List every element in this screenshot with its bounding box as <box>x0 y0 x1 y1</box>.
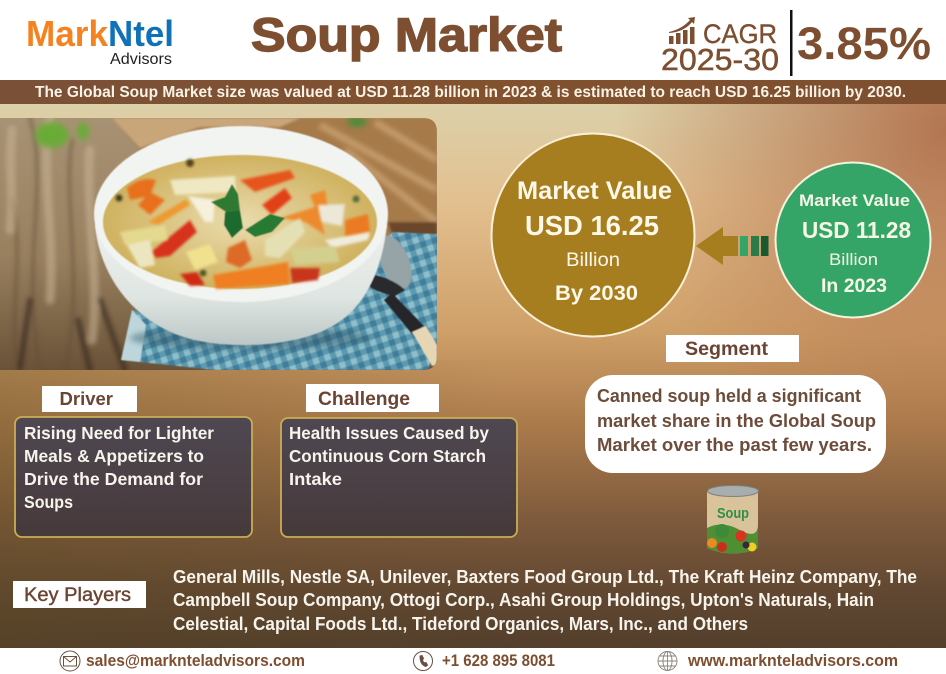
logo: MarkNtel Advisors <box>26 13 174 68</box>
soup surface <box>103 155 377 289</box>
photo: bowl of vegetable soup <box>0 117 437 370</box>
summary band <box>0 80 946 104</box>
driver panel: Meals & Appetizers to <box>24 446 204 466</box>
segment heading: Segment <box>685 339 769 360</box>
challenge panel: Continuous Corn Starch <box>289 446 486 466</box>
key players list <box>173 567 917 634</box>
icon: growth chart <box>669 17 695 44</box>
key players heading: Key Players <box>24 585 131 606</box>
challenge heading: Challenge <box>318 388 410 410</box>
header background <box>0 0 946 80</box>
driver panel: Rising Need for Lighter <box>24 423 214 443</box>
bowl rim <box>94 126 388 302</box>
circle: market value 2023 <box>776 162 930 318</box>
spoon <box>368 231 437 366</box>
driver panel: Drive the Demand for <box>24 469 203 489</box>
key players list: Celestial, Capital Foods Ltd., Tideford Organics, Mars, Inc., and Others <box>173 614 748 634</box>
footer <box>0 648 946 674</box>
driver heading <box>42 386 137 412</box>
bowl shadow on cloth <box>130 326 370 350</box>
logo: MarkNtel Advisors: Advisors <box>110 51 172 68</box>
title: Soup Market <box>251 8 562 61</box>
circle: market value 2030: By 2030 <box>555 282 638 305</box>
driver panel <box>15 417 252 537</box>
circle: market value 2030: USD 16.25 <box>525 210 659 241</box>
phone number: +1 628 895 8081 <box>442 652 555 670</box>
segment text bubble: market share in the Global Soup <box>597 410 876 431</box>
logo: MarkNtel Advisors: Ntel <box>108 13 174 54</box>
circle: market value 2023: USD 11.28 <box>802 217 911 243</box>
website: www.marknteladvisors.com <box>687 652 898 670</box>
CAGR block <box>661 10 931 77</box>
key players list: General Mills, Nestle SA, Unilever, Baxters Food Group Ltd., The Kraft Heinz Company, The <box>173 567 917 587</box>
email address: sales@marknteladvisors.com <box>86 652 305 670</box>
segment text bubble <box>585 375 886 473</box>
segment heading <box>666 335 799 362</box>
icon: soup can <box>707 486 758 554</box>
CAGR block: CAGR <box>703 19 777 49</box>
challenge heading <box>306 384 439 412</box>
icon: email <box>60 651 80 671</box>
circle: market value 2030: Billion <box>566 249 620 271</box>
circle: market value 2030 <box>492 134 694 336</box>
icon: soup can: Soup <box>717 505 749 522</box>
circle: market value 2023: In 2023 <box>821 275 887 297</box>
circle: market value 2023: Billion <box>829 250 878 269</box>
circle: market value 2023: Market Value <box>799 191 910 210</box>
key players list: Campbell Soup Company, Ottogi Corp., Asahi Group Holdings, Upton's Naturals, Hain <box>173 590 874 610</box>
cutting board <box>112 118 437 246</box>
parsley garnish <box>211 184 285 238</box>
circle: market value 2030: Market Value <box>517 177 672 205</box>
icon: phone <box>414 652 432 670</box>
arrow from 2023 to 2030 <box>696 227 768 265</box>
challenge panel <box>281 418 517 537</box>
CAGR block: 2025-30 <box>661 42 779 77</box>
challenge panel: Intake <box>289 469 342 489</box>
segment text bubble: Canned soup held a significant <box>597 385 861 406</box>
segment text bubble: Market over the past few years. <box>597 434 872 455</box>
driver heading: Driver <box>60 388 113 409</box>
bowl body <box>95 225 387 345</box>
key players heading <box>13 581 146 608</box>
CAGR block: 3.85% <box>797 18 931 69</box>
blue checked cloth <box>121 232 437 370</box>
icon: globe <box>658 652 677 670</box>
driver panel: Soups <box>24 492 73 512</box>
potato and cabbage <box>116 159 370 276</box>
challenge panel: Health Issues Caused by <box>289 423 489 443</box>
summary band: The Global Soup Market size was valued at USD 11.28 billion in 2023 & is estimated to reach USD 16.25 billion by 2030. <box>35 84 906 101</box>
carrots and peppers <box>127 170 370 289</box>
green herbs in background <box>35 117 367 148</box>
logo: MarkNtel Advisors: Mark <box>26 13 109 54</box>
wooden table <box>0 118 437 370</box>
